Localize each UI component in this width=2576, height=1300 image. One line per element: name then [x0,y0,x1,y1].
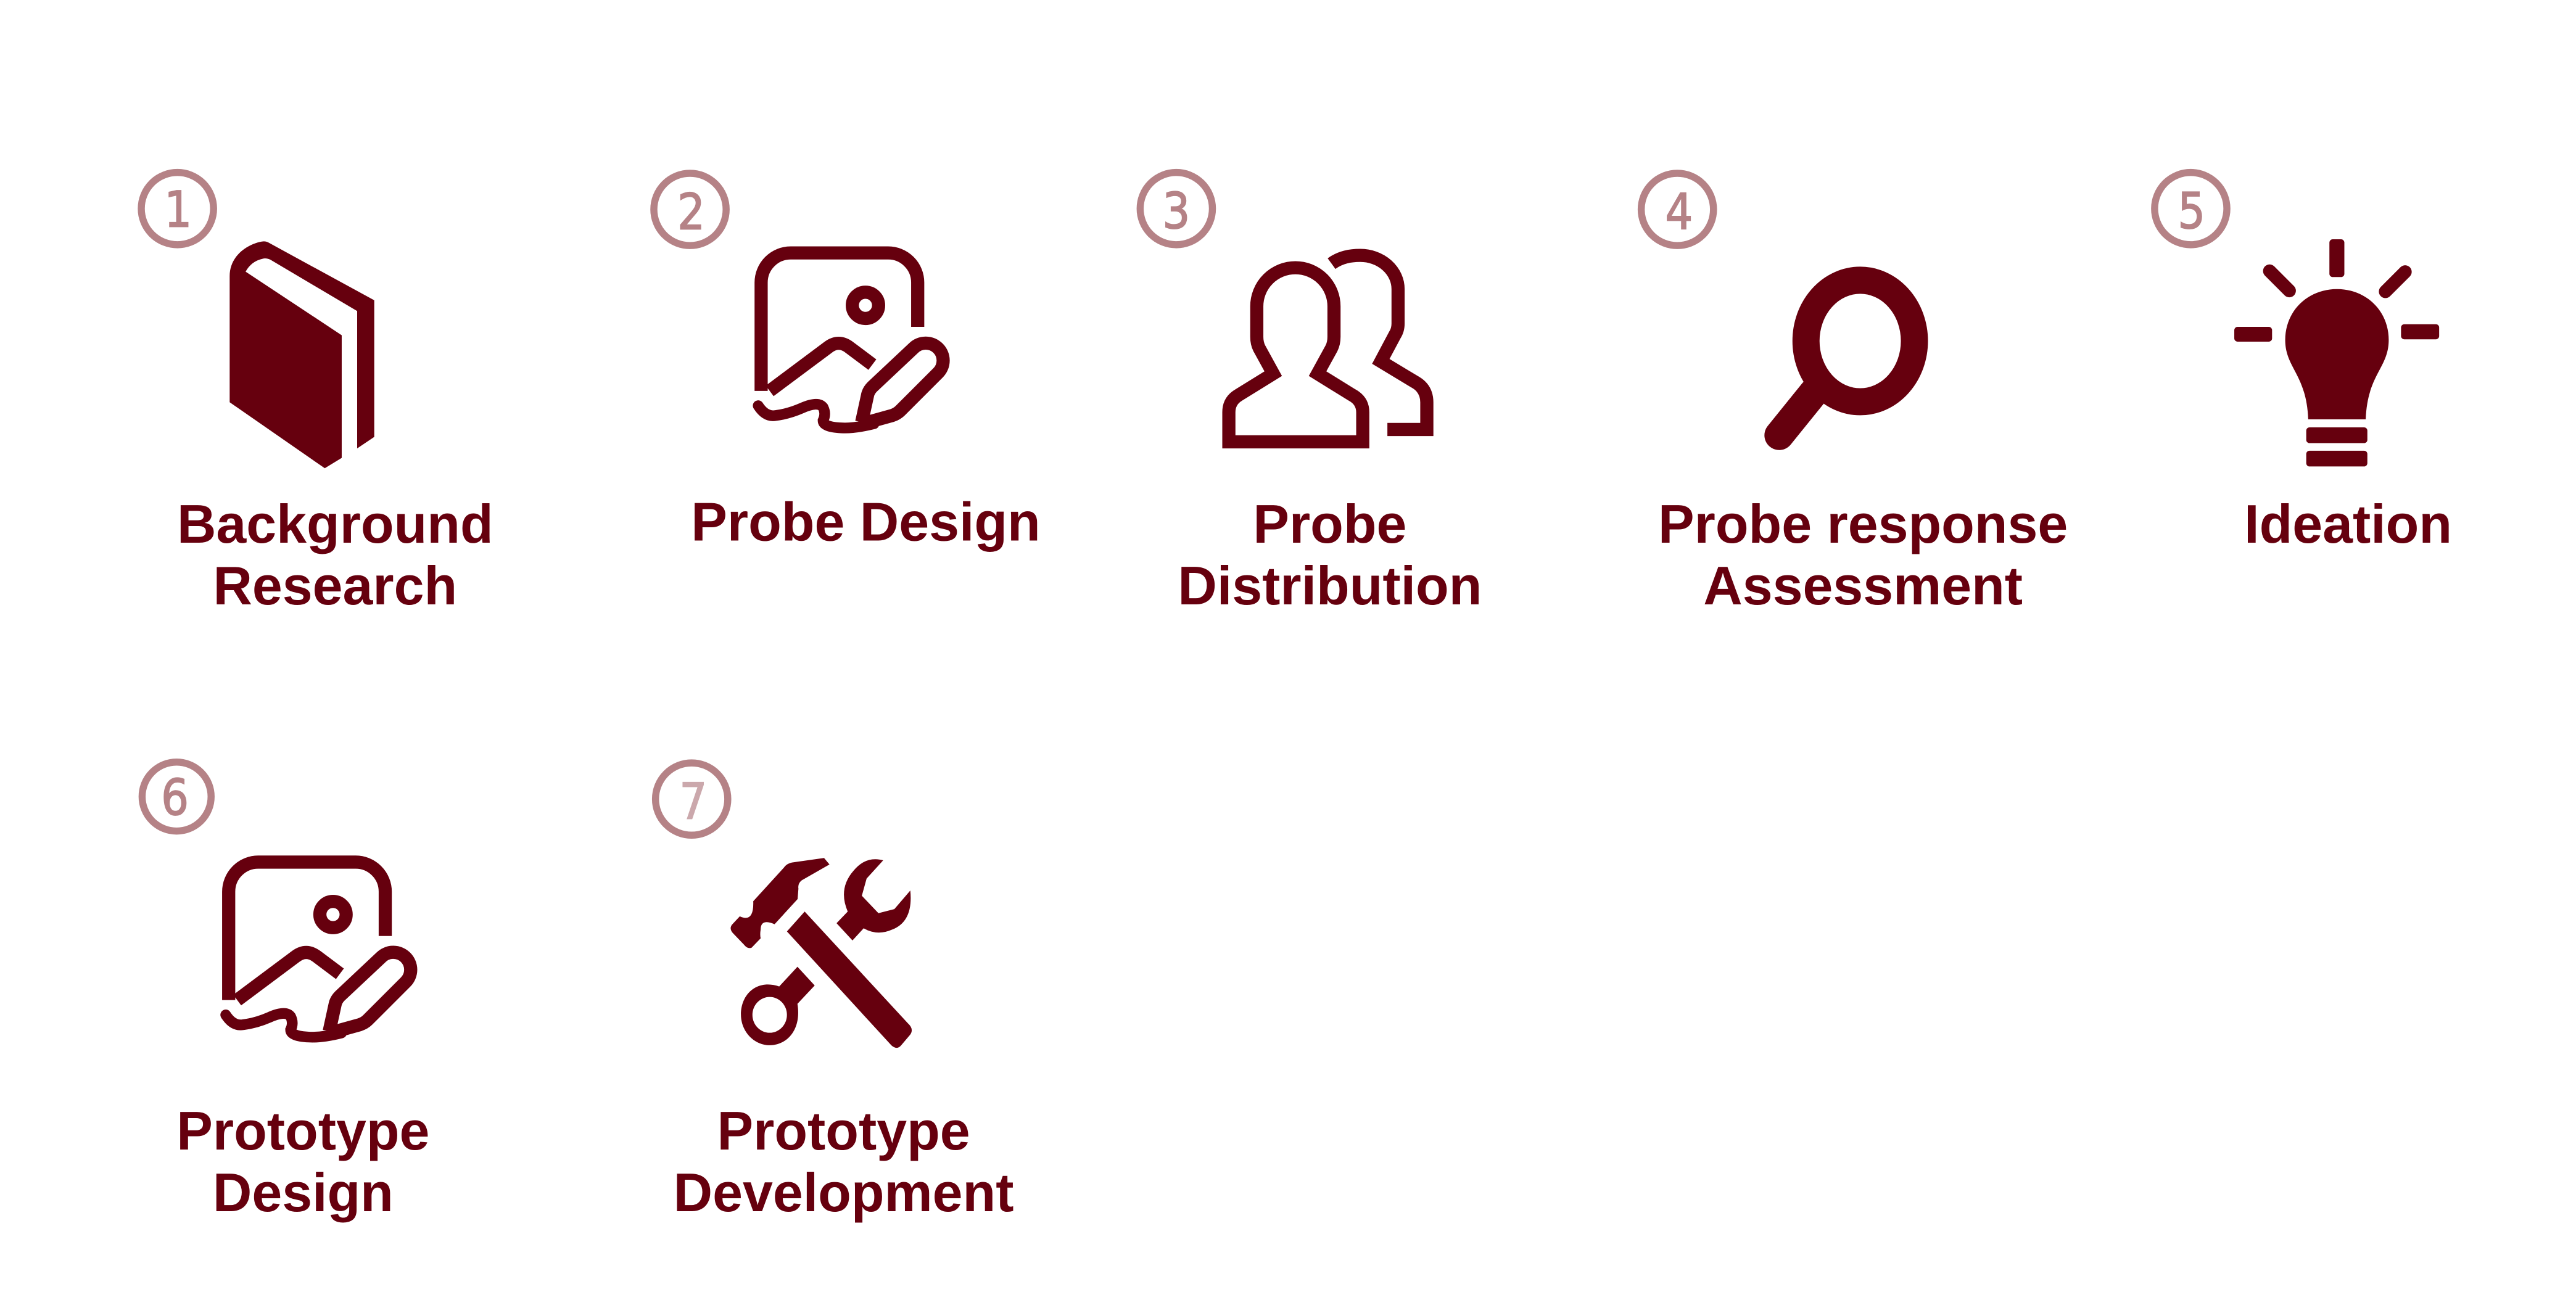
number badge 4 [1641,173,1714,245]
number badge 4: 4 [1665,183,1693,241]
icon: image with pen [758,253,943,428]
label: Prototype Design [176,1100,429,1223]
label: Background Research: Research [213,555,457,616]
step 2: probe design [654,173,1041,553]
icon: book [229,241,374,468]
number badge 1 [141,173,213,245]
number badge 1: 1 [164,181,192,239]
number badge 2: 2 [677,183,705,241]
icon: light bulb [2234,239,2439,466]
step 6: prototype design [142,762,429,1223]
label: Probe Distribution: Probe [1253,493,1406,554]
number badge 2 [654,173,726,245]
label: Prototype Development: Prototype [717,1100,970,1161]
label: Probe response Assessment [1658,493,2068,616]
step 5: ideation [2155,173,2452,554]
icon: two people [1229,255,1427,442]
step 7: prototype development [656,763,1013,1223]
icon: magnifying glass [1779,280,1915,435]
number badge 6 [142,762,211,831]
label: Probe Distribution [1178,493,1482,616]
number badge 5 [2155,173,2227,245]
label: Background Research [177,493,493,616]
number badge 3: 3 [1163,183,1190,240]
label: Prototype Design: Design [213,1162,394,1223]
number badge 5: 5 [2178,183,2205,240]
step 1: background research [141,173,493,616]
icon: hammer and wrench [730,858,912,1048]
label: Background Research: Background [177,493,493,554]
label: Prototype Design: Prototype [176,1100,429,1161]
number badge 7 [656,763,728,835]
number badge 7: 7 [680,773,707,831]
step 3: probe distribution [1140,173,1482,616]
label: Probe response Assessment: Assessment [1703,555,2023,616]
label: Prototype Development [674,1100,1013,1223]
label: Ideation: Ideation [2244,493,2452,554]
step 4: probe response assessment [1641,173,2068,616]
label: Prototype Development: Development [674,1162,1013,1223]
number badge 3 [1140,173,1212,245]
number badge 6: 6 [161,769,189,826]
label: Probe Distribution: Distribution [1178,555,1482,616]
label: Probe response Assessment: Probe response [1658,493,2068,554]
label: Probe Design: Probe Design [691,492,1041,553]
icon: image with pen [226,862,411,1037]
